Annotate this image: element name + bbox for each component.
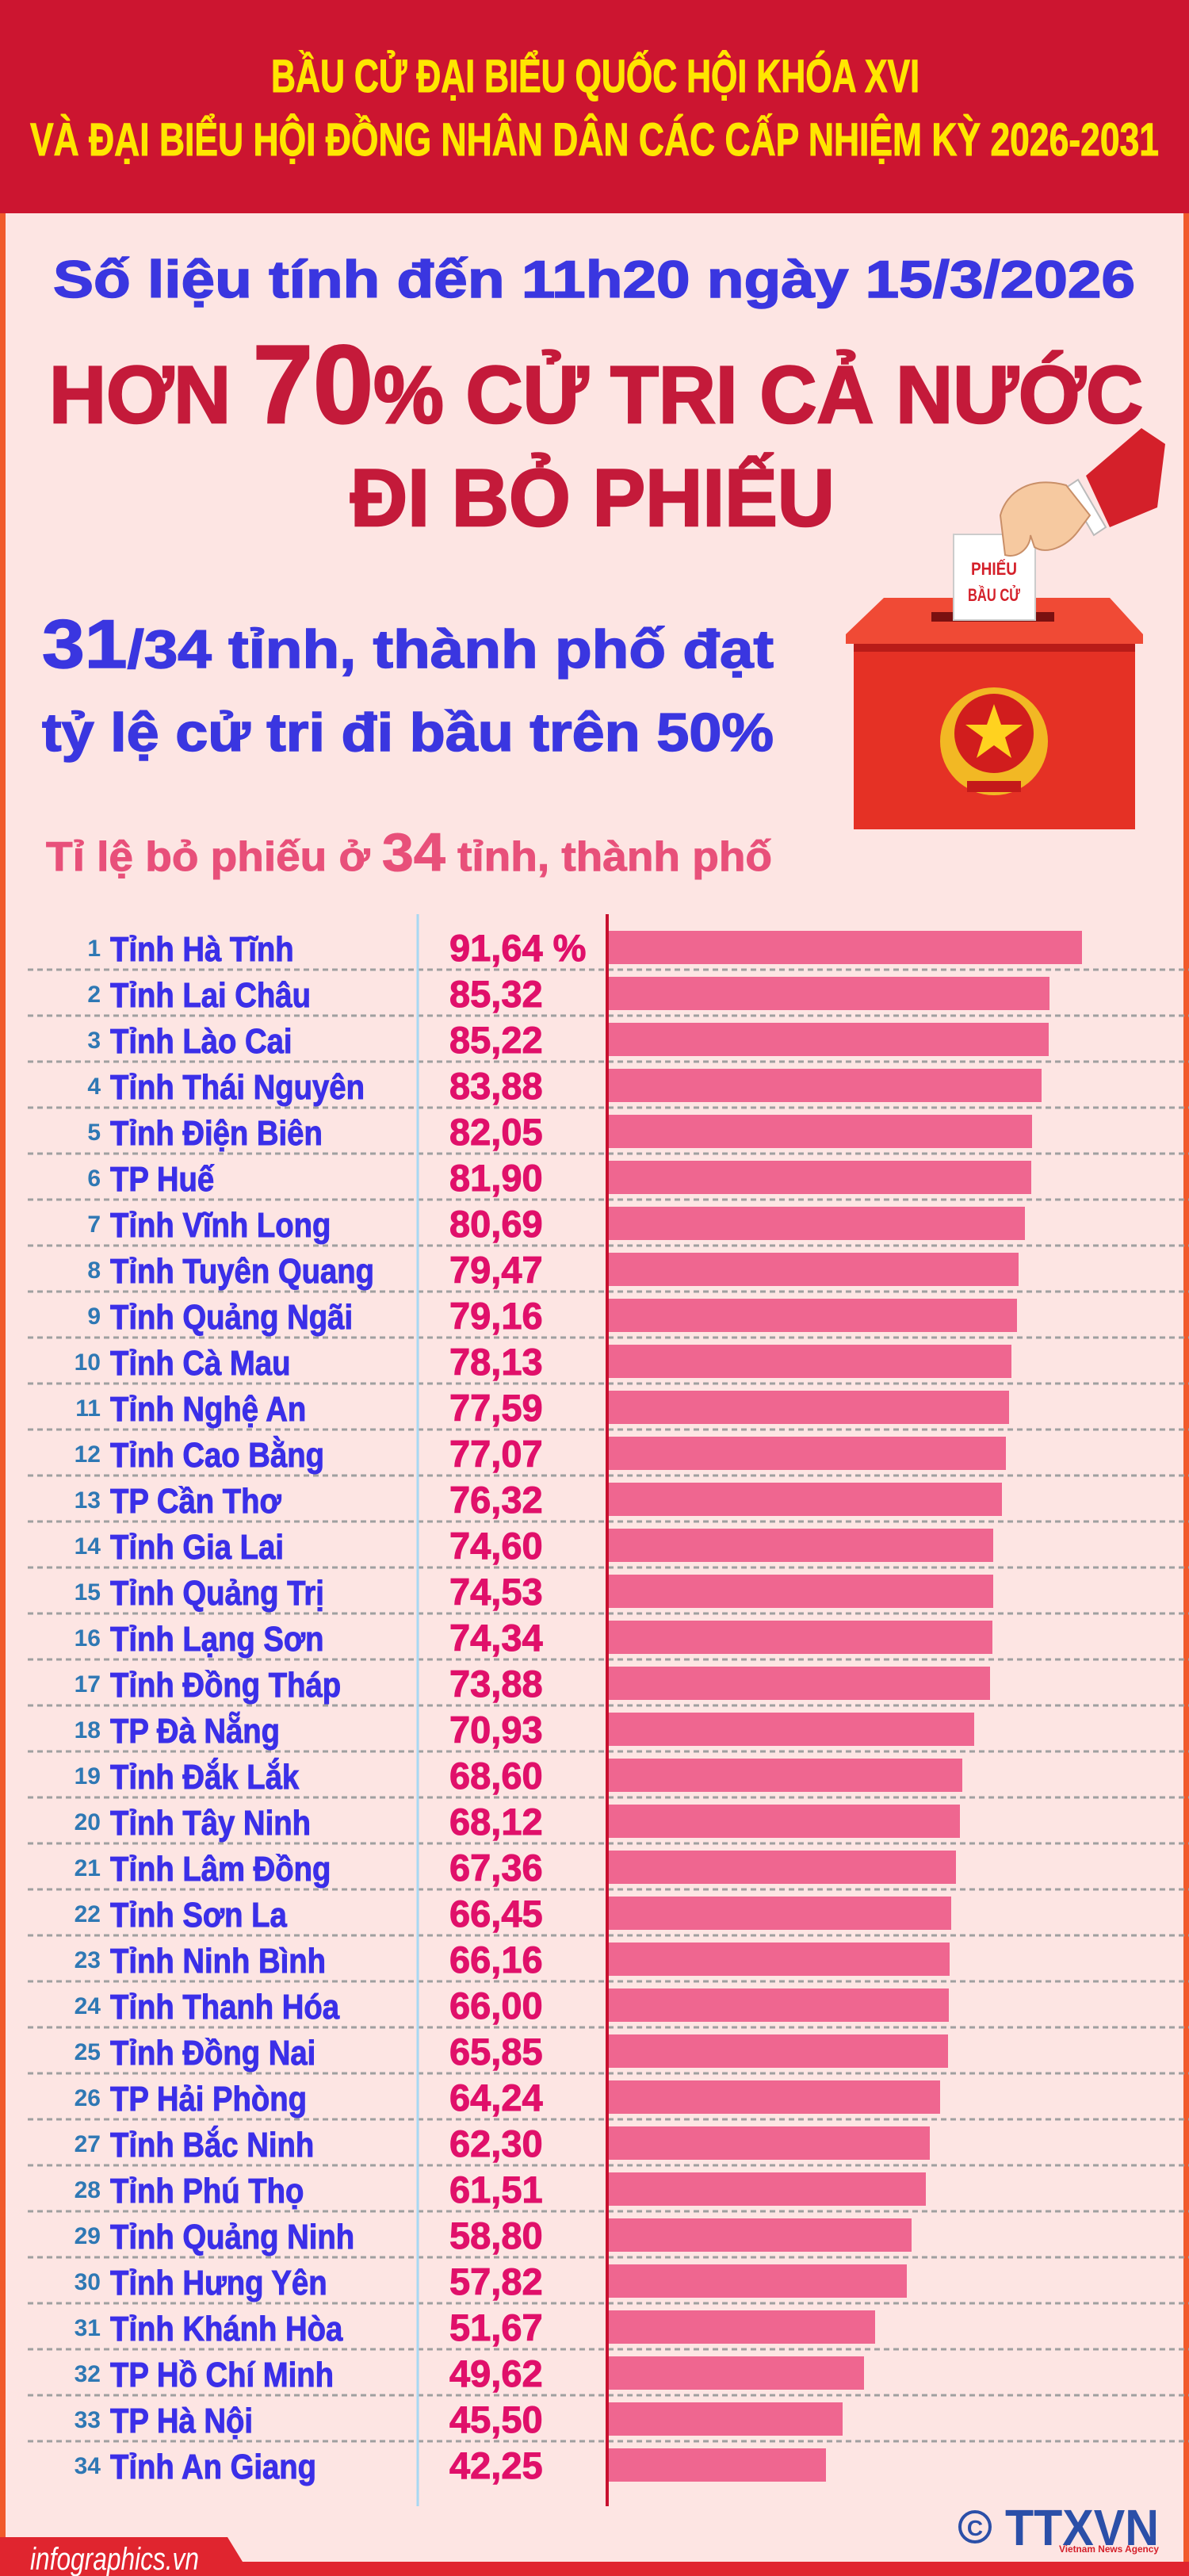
turnout values: 77,07: [449, 1433, 543, 1475]
turnout values: 77,59: [449, 1387, 543, 1429]
province names: Tỉnh Đồng Nai: [110, 2034, 315, 2073]
rank numbers: 25: [75, 2039, 101, 2065]
rank numbers: 10: [75, 1349, 101, 1376]
subtitle: data time: Số liệu tính đến 11h20 ngày 15/3/2026: [53, 250, 1135, 308]
province names: Tỉnh Tuyên Quang: [110, 1252, 374, 1291]
province names: Tỉnh Quảng Trị: [110, 1574, 324, 1613]
turnout values: [449, 927, 586, 2486]
turnout values: 85,22: [449, 1019, 543, 1061]
province names: Tỉnh Thái Nguyên: [110, 1068, 365, 1107]
rank numbers: 23: [75, 1947, 101, 1973]
headline: ĐI BỎ PHIẾU: [350, 453, 835, 543]
turnout values: 85,32: [449, 973, 543, 1015]
province names: Tỉnh Điện Biên: [110, 1114, 323, 1153]
turnout values: 70,93: [449, 1709, 543, 1751]
turnout values: 42,25: [449, 2444, 543, 2486]
title line 1: BẦU CỬ ĐẠI BIỂU QUỐC HỘI KHÓA XVI: [271, 51, 919, 102]
turnout values: 51,67: [449, 2306, 543, 2348]
province names: TP Cần Thơ: [110, 1482, 281, 1521]
province names: Tỉnh Đồng Tháp: [110, 1666, 341, 1705]
province names: Tỉnh Cà Mau: [110, 1344, 290, 1383]
rank numbers: 9: [87, 1303, 101, 1330]
chart title: Tỉ lệ bỏ phiếu ở 34 tỉnh, thành phố: [46, 822, 772, 882]
rank numbers: 32: [75, 2361, 101, 2387]
province names: Tỉnh Hà Tĩnh: [110, 930, 294, 969]
rank numbers: 16: [75, 1625, 101, 1652]
footer: infographics.vn: [30, 2542, 199, 2576]
turnout values: 83,88: [449, 1065, 543, 1107]
rank numbers: 27: [75, 2131, 101, 2157]
rank numbers: 20: [75, 1809, 101, 1835]
rank numbers: 15: [75, 1579, 101, 1606]
rank numbers: 22: [75, 1901, 101, 1927]
province names: Tỉnh Thanh Hóa: [110, 1988, 340, 2027]
rank numbers: 8: [87, 1257, 101, 1284]
rank numbers: 26: [75, 2085, 101, 2111]
turnout values: 66,16: [449, 1939, 543, 1981]
turnout values: 68,12: [449, 1801, 543, 1843]
province names: TP Đà Nẵng: [110, 1710, 280, 1751]
turnout values: 66,45: [449, 1893, 543, 1935]
rank numbers: 33: [75, 2407, 101, 2433]
turnout values: 79,47: [449, 1249, 543, 1291]
bars: [609, 931, 1082, 2482]
turnout values: 81,90: [449, 1157, 543, 1199]
turnout values: 49,62: [449, 2352, 543, 2394]
province names: Tỉnh Vĩnh Long: [110, 1206, 331, 1245]
rank numbers: 29: [75, 2223, 101, 2249]
turnout values: 78,13: [449, 1341, 543, 1383]
logo: TTXVN: TTXVN: [1005, 2499, 1159, 2556]
turnout values: 45,50: [449, 2398, 543, 2440]
turnout values: 76,32: [449, 1479, 543, 1521]
turnout values: 62,30: [449, 2122, 543, 2165]
province names: [110, 930, 374, 2486]
hand: [1000, 482, 1090, 556]
turnout values: 74,60: [449, 1525, 543, 1567]
province names: Tỉnh Lâm Đồng: [110, 1850, 331, 1889]
illustration: ballot box with hand: BẦU CỬ: [968, 585, 1021, 605]
turnout values: 74,34: [449, 1617, 543, 1659]
rank numbers: 2: [87, 982, 101, 1008]
rank numbers: 30: [75, 2269, 101, 2295]
province names: Tỉnh Phú Thọ: [110, 2172, 304, 2210]
rank numbers: 18: [75, 1717, 101, 1743]
rank numbers: 4: [87, 1074, 101, 1100]
province names: Tỉnh Quảng Ngãi: [110, 1298, 353, 1337]
province names: Tỉnh Hưng Yên: [110, 2264, 327, 2302]
turnout values: 61,51: [449, 2168, 543, 2210]
rank numbers: 21: [75, 1855, 101, 1881]
province names: TP Huế: [110, 1160, 214, 1199]
province names: Tỉnh Ninh Bình: [110, 1942, 326, 1981]
turnout values: 58,80: [449, 2214, 543, 2256]
key stat text: tỷ lệ cử tri đi bầu trên 50%: [42, 702, 774, 763]
rank numbers: 24: [75, 1993, 101, 2019]
province names: Tỉnh Gia Lai: [110, 1528, 284, 1567]
rank numbers: 12: [75, 1441, 101, 1468]
province names: Tỉnh Lào Cai: [110, 1022, 292, 1061]
province names: Tỉnh Cao Bằng: [110, 1436, 324, 1475]
rank numbers: 11: [75, 1395, 101, 1422]
headline: HƠN 70% CỬ TRI CẢ NƯỚC: [49, 322, 1143, 446]
key stat text: [42, 607, 774, 763]
body: [854, 644, 1135, 829]
emblem: [940, 687, 1048, 795]
province names: Tỉnh Nghệ An: [110, 1390, 306, 1429]
rank numbers: 1: [87, 936, 101, 962]
province names: Tỉnh Bắc Ninh: [110, 2126, 314, 2165]
turnout values: 64,24: [449, 2076, 543, 2119]
rank numbers: 31: [75, 2315, 101, 2341]
turnout values: 66,00: [449, 1985, 543, 2027]
rank numbers: 19: [75, 1763, 101, 1789]
rank numbers: 34: [75, 2453, 101, 2479]
turnout values: 57,82: [449, 2260, 543, 2302]
province names: Tỉnh Khánh Hòa: [110, 2310, 343, 2348]
footer: [0, 2537, 1189, 2576]
province names: TP Hồ Chí Minh: [110, 2356, 334, 2394]
lid: [846, 598, 1143, 644]
turnout values: 68,60: [449, 1755, 543, 1797]
logo: TTXVN: C: [967, 2516, 983, 2540]
rank numbers: 17: [75, 1671, 101, 1698]
arm sleeve: [1086, 428, 1165, 527]
rank numbers: 14: [75, 1533, 101, 1560]
ballot paper: [954, 534, 1035, 620]
province names: Tỉnh An Giang: [110, 2448, 316, 2486]
province names: Tỉnh Lai Châu: [110, 976, 311, 1015]
rank numbers: 6: [87, 1166, 101, 1192]
headline: [49, 322, 1143, 543]
illustration: ballot box with hand: [846, 428, 1165, 829]
rank numbers: [75, 936, 101, 2479]
province names: TP Hà Nội: [110, 2402, 253, 2440]
province names: Tỉnh Quảng Ninh: [110, 2218, 354, 2256]
rank numbers: 3: [87, 1028, 101, 1054]
bar chart: turnout by province: [28, 914, 1189, 2506]
turnout values: 67,36: [449, 1847, 543, 1889]
rank numbers: 13: [75, 1487, 101, 1514]
logo: TTXVN: Vietnam News Agency: [1059, 2543, 1159, 2555]
key stat text: 31/34 tỉnh, thành phố đạt: [42, 607, 774, 683]
turnout values: 73,88: [449, 1663, 543, 1705]
rank numbers: 28: [75, 2177, 101, 2203]
province names: TP Hải Phòng: [110, 2080, 307, 2119]
rank numbers: 7: [87, 1211, 101, 1238]
turnout values: 80,69: [449, 1203, 543, 1245]
turnout values: 82,05: [449, 1111, 543, 1153]
province names: Tỉnh Lạng Sơn: [110, 1620, 323, 1659]
province names: Tỉnh Tây Ninh: [110, 1804, 311, 1843]
turnout values: 74,53: [449, 1571, 543, 1613]
turnout values: 79,16: [449, 1295, 543, 1337]
turnout values: 91,64 %: [449, 927, 586, 969]
turnout values: 65,85: [449, 2031, 543, 2073]
province names: Tỉnh Đắk Lắk: [110, 1758, 299, 1797]
illustration: ballot box with hand: PHIẾU: [971, 559, 1017, 579]
header banner: [0, 0, 1189, 213]
rank numbers: 5: [87, 1120, 101, 1146]
province names: Tỉnh Sơn La: [110, 1896, 288, 1935]
